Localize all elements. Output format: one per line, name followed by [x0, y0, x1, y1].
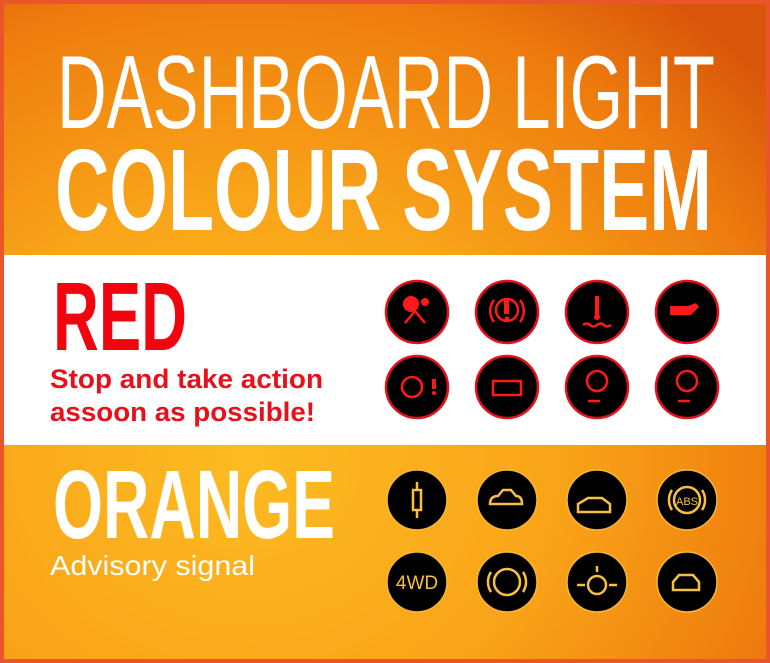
icons: orange	[387, 470, 717, 612]
icons: orange: 4WD	[396, 573, 438, 594]
panel: red band	[4, 255, 766, 445]
title	[55, 35, 715, 255]
text: red description: Stop and take action	[50, 364, 323, 394]
icons: orange: ABS	[676, 496, 698, 508]
text: red description: assoon as possible!	[50, 397, 315, 427]
text: red description	[50, 364, 323, 427]
heading: ORANGE: ORANGE	[53, 450, 335, 559]
icons: red	[386, 281, 718, 418]
heading: RED: RED	[53, 262, 187, 371]
text: advisory signal: Advisory signal	[50, 550, 255, 581]
